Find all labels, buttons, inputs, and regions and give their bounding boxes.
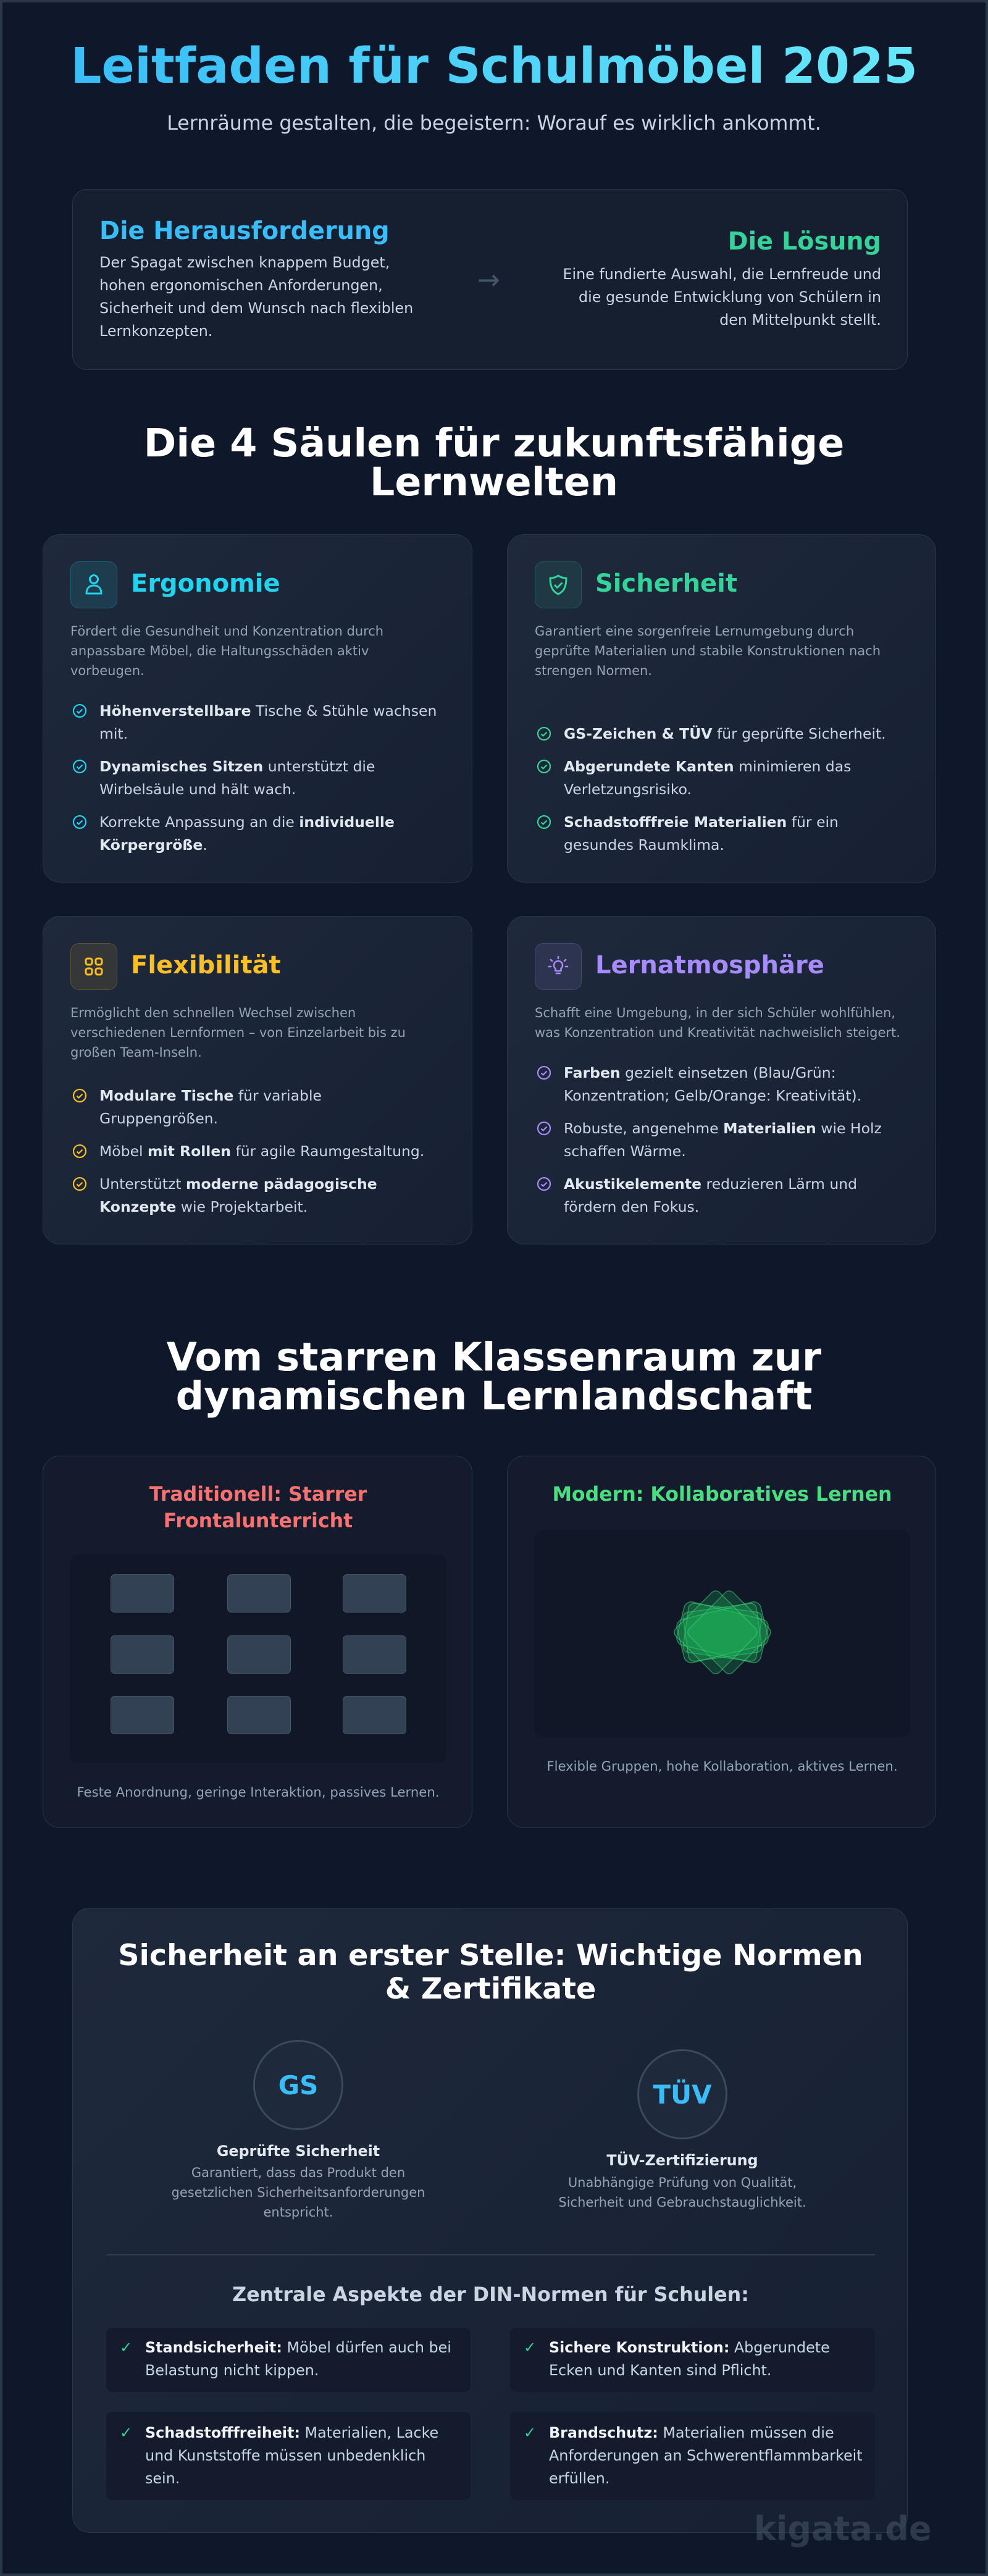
text: challenge: Lernkonzepten. bbox=[99, 322, 212, 340]
panel: Sicherheit bbox=[507, 534, 936, 883]
item: Standsicherheit: Standsicherheit: Möbel dürfen auch bei bbox=[145, 2339, 451, 2356]
item: Standsicherheit: ✓ bbox=[120, 2339, 132, 2356]
description: anpassbare Möbel, die Haltungsschäden aktiv bbox=[70, 644, 369, 658]
bullet list: Korrekte Anpassung an die individuelle bbox=[99, 813, 395, 831]
description bbox=[535, 624, 881, 678]
watermark: kigata.de bbox=[754, 2509, 932, 2548]
caption: Flexible Gruppen, hohe Kollaboration, aktives Lernen. bbox=[546, 1758, 898, 1774]
icon: GS circle bbox=[253, 2040, 343, 2130]
bullet list: gesundes Raumklima. bbox=[564, 836, 724, 854]
description: verschiedenen Lernformen – von Einzelarbeit bis zu bbox=[70, 1025, 406, 1040]
bullet list bbox=[73, 702, 437, 854]
heading: Frontalunterricht bbox=[164, 1510, 353, 1532]
heading: & Zertifikate bbox=[385, 1972, 596, 2006]
badge: TÜV bbox=[558, 2049, 806, 2210]
panel: Ergonomie bbox=[43, 534, 472, 883]
description: geprüfte Materialien und stabile Konstruktionen nach bbox=[535, 644, 881, 658]
item: Schadstofffreiheit: und Kunststoffe müssen unbedenklich bbox=[145, 2447, 425, 2464]
heading: Traditionell: Starrer bbox=[149, 1483, 367, 1506]
icon: shield bbox=[535, 561, 582, 608]
badge: GS bbox=[172, 2040, 425, 2220]
bullet list: schaffen Wärme. bbox=[564, 1143, 686, 1160]
heading: classroom transformation: Vom starren Klassenraum zur bbox=[167, 1334, 821, 1380]
panel: traditional bbox=[43, 1456, 472, 1828]
description: großen Team-Inseln. bbox=[70, 1045, 202, 1060]
heading bbox=[118, 1939, 863, 2006]
diagram: desk rows bbox=[70, 1554, 446, 1763]
bullet list bbox=[73, 1087, 424, 1215]
bullet list: mit. bbox=[99, 725, 128, 742]
description bbox=[70, 624, 383, 678]
panel: challenge and solution bbox=[72, 189, 908, 370]
description: Garantiert, dass das Produkt den bbox=[191, 2165, 405, 2180]
item: Brandschutz bbox=[510, 2412, 875, 2500]
icon: lightbulb bbox=[535, 943, 582, 990]
heading: Modern: Kollaboratives Lernen bbox=[552, 1483, 892, 1506]
subheading: DIN norms: Zentrale Aspekte der DIN-Normen für Schulen: bbox=[232, 2284, 749, 2306]
item: Brandschutz: Brandschutz: Materialien müssen die bbox=[549, 2424, 834, 2441]
text: solution bbox=[563, 266, 881, 329]
description: Unabhängige Prüfung von Qualität, bbox=[568, 2175, 797, 2190]
heading: Flexibilität bbox=[131, 951, 281, 980]
description: Schafft eine Umgebung, in der sich Schüler wohlfühlen, bbox=[535, 1005, 895, 1020]
item: Sichere Konstruktion bbox=[510, 2328, 875, 2392]
description: Fördert die Gesundheit und Konzentration durch bbox=[70, 624, 383, 639]
text: solution: den Mittelpunkt stellt. bbox=[719, 311, 881, 329]
heading: 4 pillars: Lernwelten bbox=[370, 459, 618, 505]
bullet list: Robuste, angenehme Materialien wie Holz bbox=[564, 1120, 882, 1137]
heading: classroom transformation: dynamischen Lernlandschaft bbox=[176, 1373, 812, 1419]
heading: 4 pillars bbox=[144, 420, 844, 505]
bullet list: Konzentration; Gelb/Orange: Kreativität). bbox=[564, 1087, 861, 1104]
panel: Flexibilität bbox=[43, 916, 472, 1244]
bullet list: Abgerundete Kanten minimieren das bbox=[564, 758, 851, 775]
panel: safety norms bbox=[72, 1908, 908, 2533]
text: challenge: Der Spagat zwischen knappem Budget, bbox=[99, 254, 390, 271]
heading: Sicherheit an erster Stelle: Wichtige Normen bbox=[118, 1939, 863, 1973]
description bbox=[558, 2175, 806, 2210]
bullet list: Dynamisches Sitzen unterstützt die bbox=[99, 758, 375, 775]
item: Standsicherheit: Belastung nicht kippen. bbox=[145, 2362, 319, 2379]
text: challenge bbox=[99, 254, 413, 340]
bullet list: Möbel mit Rollen für agile Raumgestaltung. bbox=[99, 1143, 424, 1160]
bullet list: GS-Zeichen & TÜV für geprüfte Sicherheit. bbox=[564, 725, 886, 742]
text: solution: Eine fundierte Auswahl, die Lernfreude und bbox=[563, 266, 881, 283]
bullet list: Modulare Tische für variable bbox=[99, 1087, 322, 1104]
item: Sichere Konstruktion: Sichere Konstruktion: Abgerundete bbox=[549, 2339, 830, 2356]
bullet list: Schadstofffreie Materialien für ein bbox=[564, 813, 839, 831]
heading: classroom transformation bbox=[167, 1334, 821, 1419]
bullet list: Gruppengrößen. bbox=[99, 1109, 218, 1126]
item: Brandschutz: Anforderungen an Schwerentflammbarkeit bbox=[549, 2447, 863, 2464]
text: solution: die gesunde Entwicklung von Schülern in bbox=[579, 288, 881, 306]
item: Brandschutz: erfüllen. bbox=[549, 2470, 609, 2487]
description: strengen Normen. bbox=[535, 663, 652, 678]
icon: person bbox=[70, 561, 117, 608]
item: Brandschutz: ✓ bbox=[524, 2424, 536, 2441]
text: challenge: Sicherheit und dem Wunsch nach flexiblen bbox=[99, 300, 413, 317]
item: Sichere Konstruktion: Ecken und Kanten sind Pflicht. bbox=[549, 2362, 771, 2379]
panel: Lernatmosphäre bbox=[507, 916, 936, 1244]
item: Sichere Konstruktion: ✓ bbox=[524, 2339, 536, 2356]
bullet list bbox=[537, 1064, 882, 1215]
bullet list: Wirbelsäule und hält wach. bbox=[99, 781, 296, 798]
caption: Feste Anordnung, geringe Interaktion, passives Lernen. bbox=[77, 1784, 440, 1800]
heading: 4 pillars: Die 4 Säulen für zukunftsfähige bbox=[144, 420, 844, 466]
title: Leitfaden für Schulmöbel 2025 bbox=[70, 38, 918, 94]
item: Schadstofffreiheit: Schadstofffreiheit: Materialien, Lacke bbox=[145, 2424, 438, 2441]
arrow: → bbox=[477, 264, 500, 296]
icon: GS circle: GS bbox=[278, 2070, 318, 2100]
text: challenge: hohen ergonomischen Anforderungen, bbox=[99, 277, 383, 294]
description: Sicherheit und Gebrauchstauglichkeit. bbox=[558, 2195, 806, 2210]
panel: modern bbox=[507, 1456, 936, 1828]
item: Schadstofffreiheit bbox=[106, 2412, 471, 2500]
bullet list: Verletzungsrisiko. bbox=[564, 781, 692, 798]
heading: Ergonomie bbox=[131, 569, 280, 598]
heading: Sicherheit bbox=[595, 569, 737, 598]
subtitle: Lernräume gestalten, die begeistern: Worauf es wirklich ankommt. bbox=[167, 112, 821, 135]
description: Ermöglicht den schnellen Wechsel zwischen bbox=[70, 1005, 356, 1020]
icon: TÜV circle bbox=[637, 2049, 727, 2139]
description: gesetzlichen Sicherheitsanforderungen bbox=[172, 2185, 425, 2200]
item: Schadstofffreiheit: sein. bbox=[145, 2470, 180, 2487]
icon: TÜV circle: TÜV bbox=[653, 2079, 712, 2110]
description: was Konzentration und Kreativität nachweislich steigert. bbox=[535, 1025, 900, 1040]
bullet list: Höhenverstellbare Tische & Stühle wachsen bbox=[99, 702, 437, 720]
icon: grid bbox=[70, 943, 117, 990]
bullet list: Konzepte wie Projektarbeit. bbox=[99, 1198, 308, 1215]
description bbox=[70, 1005, 406, 1060]
heading: Lernatmosphäre bbox=[595, 951, 824, 980]
description: Garantiert eine sorgenfreie Lernumgebung durch bbox=[535, 624, 854, 639]
label: TÜV-Zertifizierung bbox=[606, 2152, 758, 2169]
description bbox=[535, 1005, 900, 1040]
bullet list: Farben gezielt einsetzen (Blau/Grün: bbox=[564, 1064, 836, 1081]
bullet list: Unterstützt moderne pädagogische bbox=[99, 1175, 377, 1193]
bullet list: Körpergröße. bbox=[99, 836, 207, 854]
diagram: collaborative cluster bbox=[534, 1530, 910, 1737]
item: Schadstofffreiheit: ✓ bbox=[120, 2424, 132, 2441]
item: Standsicherheit bbox=[106, 2328, 471, 2392]
bullet list: Akustikelemente reduzieren Lärm und bbox=[564, 1175, 857, 1193]
heading: solution: Die Lösung bbox=[728, 227, 881, 256]
description: vorbeugen. bbox=[70, 663, 144, 678]
label: Geprüfte Sicherheit bbox=[217, 2142, 380, 2160]
heading: challenge: Die Herausforderung bbox=[99, 217, 390, 245]
description bbox=[172, 2165, 425, 2220]
bullet list: fördern den Fokus. bbox=[564, 1198, 699, 1215]
heading bbox=[149, 1483, 367, 1532]
bullet list bbox=[537, 725, 886, 854]
description: entspricht. bbox=[264, 2205, 333, 2220]
